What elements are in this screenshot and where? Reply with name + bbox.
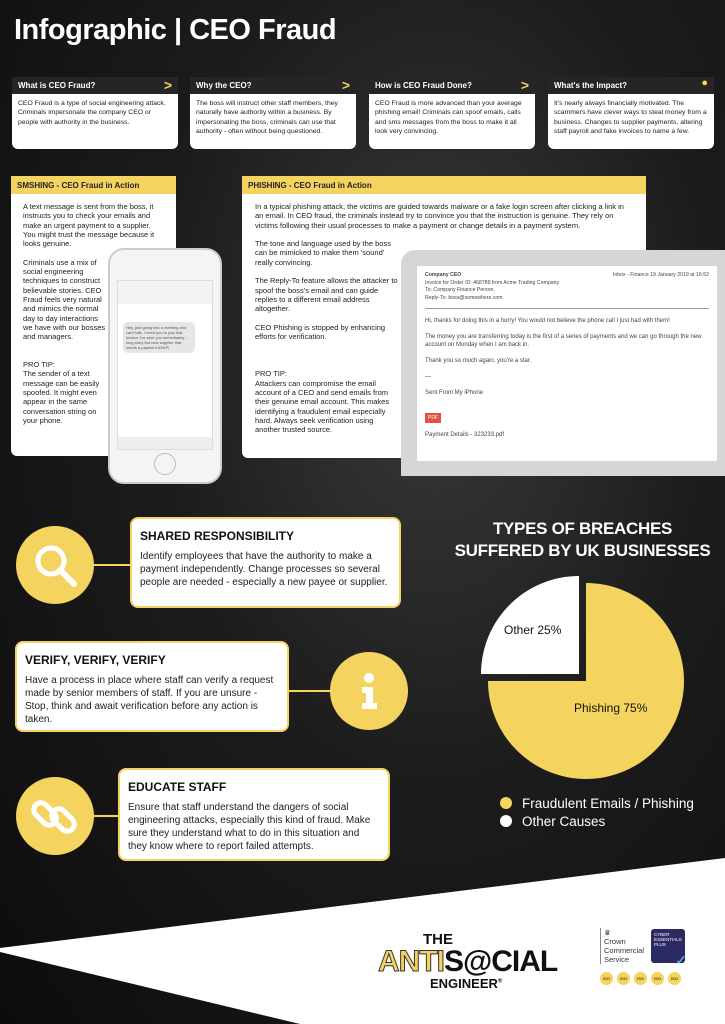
laptop mockup: Sent From My iPhone (425, 390, 483, 396)
laptop mockup: Invoice for Order ID: 468789 from Acme Trading Company (425, 280, 559, 286)
card: what is CEO fraud (12, 77, 178, 149)
laptop mockup: — (425, 374, 431, 380)
laptop mockup: PDF (428, 415, 438, 421)
card: how is CEO fraud done: How is CEO Fraud Done? (375, 81, 472, 90)
laptop mockup: To: Company Finance Person, (425, 287, 495, 293)
card: why the CEO: Why the CEO? (196, 81, 252, 90)
panel: smshing: Criminals use a mix of social engineering techniques to construct believable stories. CEO Fraud feels very natural and mimics the normal day to day interactions we have with our bosses and managers. (23, 258, 105, 341)
tip: verify (15, 641, 289, 732)
panel: phishing: PRO TIP: (255, 369, 287, 378)
card: what is CEO fraud: What is CEO Fraud? (18, 81, 95, 90)
card: why the CEO (190, 77, 356, 149)
badges: ISO: ISO (603, 976, 610, 981)
chart title (455, 519, 710, 560)
logo: crown commercial service: ♛ (604, 928, 611, 937)
badge: cyber essentials plus: CYBER ESSENTIALS (654, 932, 682, 942)
logo: crown commercial service: Service (604, 955, 629, 964)
card: impact: ● (701, 77, 708, 89)
laptop mockup: Thank you so much again, you're a star. (425, 358, 531, 364)
card: what is CEO fraud: > (164, 77, 172, 93)
badges: ISO (600, 972, 681, 985)
phone mockup: Hey, just going into a meeting and can't talk. I need you to pay that invoice I've sent you immediately - long story but new supplier that needs a payment ASAP! (126, 325, 187, 350)
laptop mockup (401, 250, 725, 476)
card: what is CEO fraud: CEO Fraud is a type of social engineering attack. Criminals impersonate the company CEO or people with authority in the business. (18, 100, 166, 126)
logo: the antisocial engineer (378, 931, 558, 991)
laptop mockup: The money you are transferring today is the first of a series of payments and we can go through the new account on Monday when I am back in. (425, 334, 701, 348)
card: how is CEO fraud done: CEO Fraud is more advanced than your average phishing email! Criminals can spoof emails, calls and sms messages from the boss to make it all look very convincing. (375, 100, 522, 135)
pie chart: Other 25% (504, 623, 562, 637)
icon: magnifier (16, 526, 94, 604)
card: how is CEO fraud done: > (521, 77, 529, 93)
icon: info (330, 652, 408, 730)
card: why the CEO: The boss will instruct other staff members, they naturally have authority within a business. By impersonating the boss, criminals can use that authority - often without being questioned. (196, 100, 338, 135)
panel: smshing (11, 176, 176, 456)
chart title: SUFFERED BY UK BUSINESSES (455, 541, 710, 560)
panel: phishing: PHISHING - CEO Fraud in Action (248, 181, 372, 190)
tip: educate staff: EDUCATE STAFF (128, 780, 226, 794)
laptop mockup: Hi, thanks for doing this in a hurry! You would not believe the phone call I just had with them! (425, 318, 670, 324)
laptop mockup: Payment Details - 323233.pdf (425, 432, 504, 438)
phone mockup (108, 248, 222, 484)
badges: ISO: ISO (620, 976, 627, 981)
badge: cyber essentials plus: ✓ (675, 952, 687, 968)
panel: smshing: SMSHING - CEO Fraud in Action (17, 181, 139, 190)
tip: shared responsibility: Identify employees that have the authority to make a payment independently. Change processes so several people are needed - especially a new payee or supplier. (140, 551, 387, 588)
panel: phishing: Attackers can compromise the email account of a CEO and send emails from their genuine email account. This makes identifying a fraudulent email especially hard. Always seek verification using another trusted source. (255, 379, 389, 434)
tip: verify: Have a process in place where staff can verify a request made by senior members of staff. If you are unsure - Stop, think and await verification before any action is taken. (25, 675, 273, 725)
tip: educate staff (118, 768, 390, 861)
tip: shared responsibility (130, 517, 401, 608)
legend (500, 796, 694, 829)
card: impact: It's nearly always financially motivated. The scammers have clever ways to steal money from a business. Changes to supplier payments, altering staff payroll and fake invoices to name a few. (554, 100, 707, 135)
laptop mockup: Inbox - Finance 19 January 2019 at 16:52 (613, 272, 709, 278)
badges: ISO: ISO (671, 976, 678, 981)
panel: phishing: In a typical phishing attack, the victims are guided towards malware or a fake login screen after clicking a link in an email. In CEO fraud, the criminals instead try to convince you that the instruction is genuine. They rely on victims following their usual processes to make a payment or change details in a payment system. (255, 202, 624, 230)
laptop mockup: Company CEO (425, 272, 461, 278)
card: impact (548, 77, 714, 149)
panel: smshing: The sender of a text message can be easily spoofed. It might even appear in the same conversation string on your phone. (23, 369, 99, 425)
logo: the antisocial engineer: ANTIS@CIAL (378, 945, 557, 978)
tip: educate staff: Ensure that staff understand the dangers of social engineering attacks, especially this kind of fraud. Make sure they understand what to do in this situation and they know where to report failed attempts. (128, 802, 370, 852)
logo: crown commercial service: Crown (604, 937, 626, 946)
panel: smshing: PRO TIP: (23, 360, 55, 369)
tip: shared responsibility: SHARED RESPONSIBILITY (140, 529, 294, 543)
badges: ISO: ISO (637, 976, 644, 981)
panel: phishing (242, 176, 646, 458)
panel: smshing: A text message is sent from the boss, it instructs you to check your emails and make an urgent payment to a supplier. You might trust the message because it looks genuine. (23, 202, 154, 248)
legend: Fraudulent Emails / Phishing (522, 796, 694, 811)
card: how is CEO fraud done (369, 77, 535, 149)
panel: phishing: CEO Phishing is stopped by enhancing efforts for verification. (255, 323, 385, 341)
panel: phishing: The Reply-To feature allows the attacker to spoof the boss's email and can guide replies to a different email address altogether. (255, 276, 398, 313)
icon: chain link (16, 777, 94, 855)
title: Infographic | CEO Fraud (14, 14, 336, 46)
tip: verify: VERIFY, VERIFY, VERIFY (25, 653, 166, 667)
chart title: TYPES OF BREACHES (493, 519, 672, 538)
panel: phishing: The tone and language used by the boss can be mimicked to make them 'sound' really convincing. (255, 239, 391, 267)
laptop mockup: Reply-To: boss@somewhere.com (425, 294, 503, 300)
badge: cyber essentials plus (651, 929, 685, 963)
pie chart (481, 576, 684, 779)
logo: the antisocial engineer: ENGINEER® (430, 976, 502, 991)
card: impact: What's the Impact? (554, 81, 627, 90)
pie chart: Phishing 75% (574, 701, 648, 715)
badges: ISO: ISO (654, 976, 661, 981)
logo: crown commercial service (600, 928, 644, 964)
logo: the antisocial engineer: THE (423, 931, 453, 948)
card: why the CEO: > (342, 77, 350, 93)
legend: Other Causes (522, 814, 605, 829)
badge: cyber essentials plus: PLUS (654, 942, 666, 947)
logo: crown commercial service: Commercial (604, 946, 644, 955)
